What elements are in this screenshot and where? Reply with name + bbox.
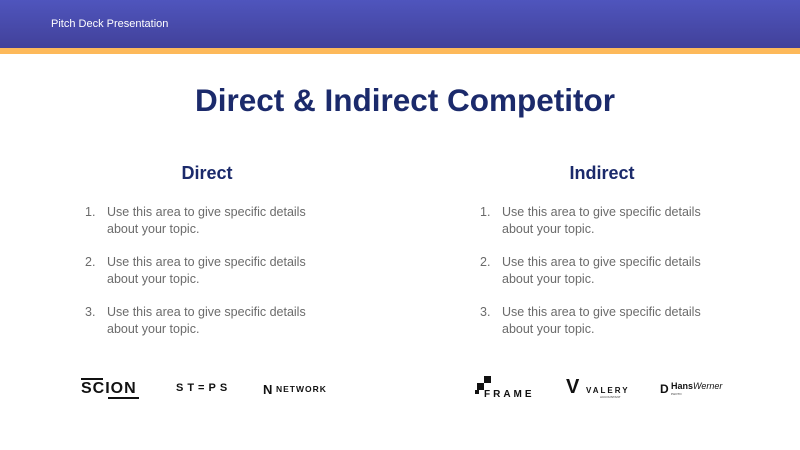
list: indirect: 3. xyxy=(480,305,490,319)
list: indirect: Use this area to give specific details about your topic. xyxy=(502,255,701,286)
logo: VALERY: ACCOUNTANT xyxy=(600,395,621,399)
logo: NETWORK: N xyxy=(263,382,272,397)
logo: NETWORK: NETWORK xyxy=(276,384,327,394)
list: direct: 3. xyxy=(85,305,95,319)
logo: HansWerner xyxy=(660,381,723,396)
orange accent stripe xyxy=(0,48,800,54)
logo: HansWerner: HansWerner xyxy=(671,381,722,391)
logo: FRAME xyxy=(475,376,535,400)
list: indirect: 2. xyxy=(480,255,490,269)
logo: STEPS: ST=PS xyxy=(176,382,231,394)
list: direct: Use this area to give specific details about your topic. xyxy=(107,205,306,236)
logo: NETWORK xyxy=(263,382,327,397)
list: direct: Use this area to give specific details about your topic. xyxy=(107,305,306,336)
logo: FRAME: FRAME xyxy=(484,389,535,400)
logo: VALERY: V xyxy=(566,376,579,398)
list: indirect: Use this area to give specific details about your topic. xyxy=(502,305,701,336)
logo: VALERY xyxy=(566,376,630,399)
list: direct: Use this area to give specific details about your topic. xyxy=(107,255,306,286)
logo: HansWerner: D xyxy=(660,382,669,396)
header bar xyxy=(0,0,800,48)
list: indirect: 1. xyxy=(480,205,490,219)
logo: SCION: SCION xyxy=(81,380,137,397)
list: direct xyxy=(85,205,306,336)
title: Direct & Indirect Competitor xyxy=(195,82,615,118)
list: indirect: Use this area to give specific details about your topic. xyxy=(502,205,701,236)
heading: Indirect: Indirect xyxy=(569,163,634,183)
list: direct: 1. xyxy=(85,205,95,219)
heading: Direct: Direct xyxy=(181,163,233,183)
list: indirect xyxy=(480,205,701,336)
logo: HansWerner: PHOTO xyxy=(671,392,682,396)
list: direct: 2. xyxy=(85,255,95,269)
header text: Pitch Deck Presentation xyxy=(51,18,168,30)
logo: VALERY: VALERY xyxy=(586,386,630,395)
